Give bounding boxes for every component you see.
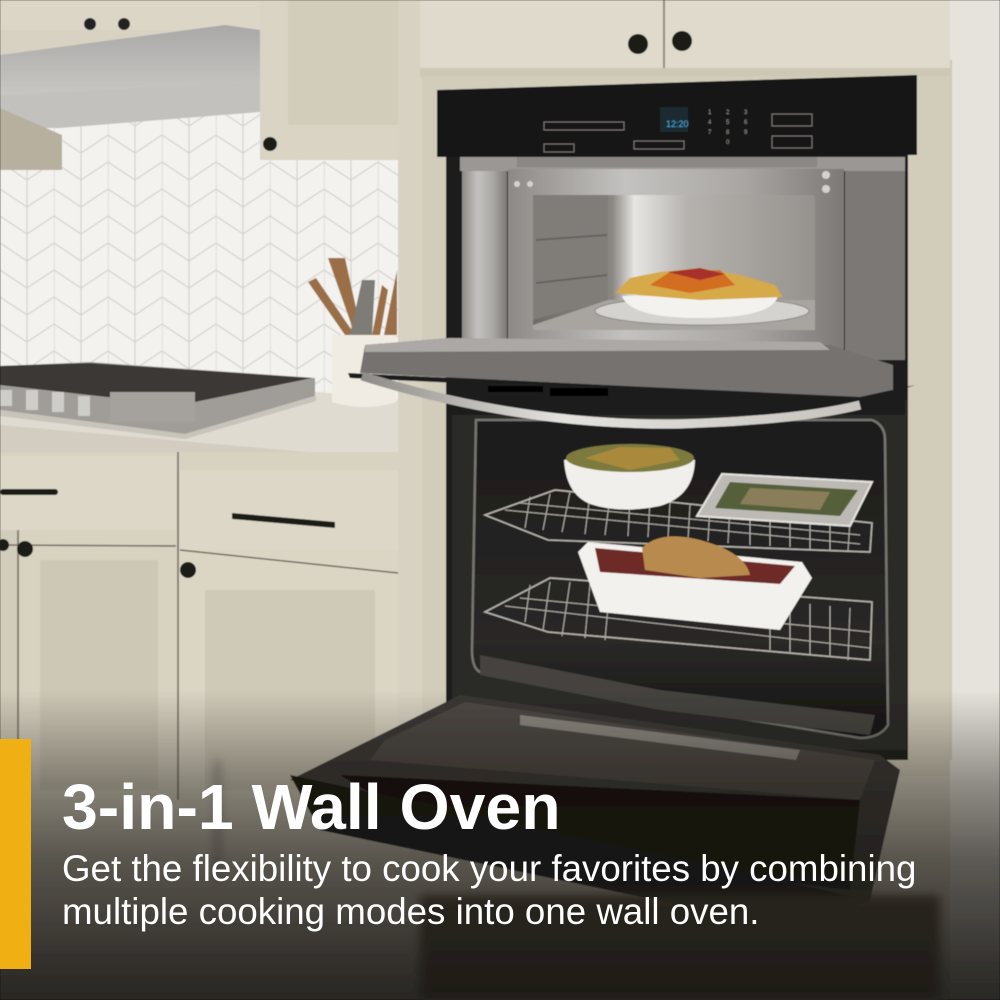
range hood (0, 25, 260, 170)
accent bar (0, 739, 31, 969)
microwave cavity surround (460, 157, 905, 360)
control panel: 8 (726, 130, 730, 136)
control panel: 7 (708, 130, 712, 136)
control panel: 4 (708, 120, 712, 126)
control panel: 1 (708, 110, 712, 116)
casserole dish (564, 444, 695, 510)
oven door open (290, 695, 900, 930)
control panel: 12:20 (666, 119, 689, 129)
control panel: 0 (726, 140, 730, 146)
countertop and cooktop (0, 362, 398, 486)
control panel (437, 75, 917, 157)
control panel: 9 (744, 130, 748, 136)
roast dish (578, 536, 812, 630)
control panel: 6 (744, 120, 748, 126)
title: 3-in-1 Wall Oven (62, 771, 561, 843)
lower scene blur (216, 760, 940, 1000)
description: multiple cooking modes into one wall oven. (62, 891, 759, 932)
sheet pan with asparagus (697, 474, 872, 526)
control panel: 2 (726, 110, 730, 116)
microwave door open (348, 338, 915, 424)
description: Get the flexibility to cook your favorites by combining (62, 848, 916, 889)
lower oven rack (485, 578, 872, 660)
knobs on microwave frame (514, 171, 830, 193)
utensil crock (308, 258, 397, 407)
bottom fade overlay (0, 690, 1000, 1000)
vent strip (517, 157, 817, 167)
turntable and nachos (595, 268, 809, 325)
microwave interior (533, 195, 815, 330)
control panel: 3 (744, 110, 748, 116)
lower oven cavity (452, 400, 907, 750)
control panel: 5 (726, 120, 730, 126)
wall oven body (290, 75, 917, 930)
lower cabinets (0, 452, 398, 802)
description (62, 848, 916, 932)
upper oven rack (485, 490, 872, 552)
